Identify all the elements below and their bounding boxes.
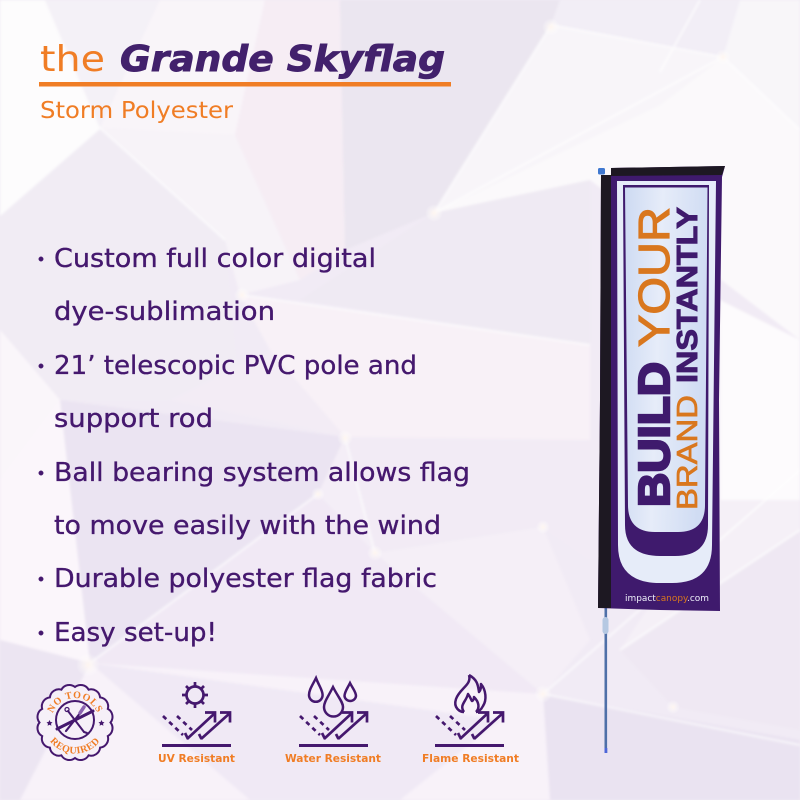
badge: no tools required: NO TOOLS (46, 692, 102, 714)
icon: water resistant (299, 678, 368, 747)
feature list (39, 244, 470, 648)
feature list: to move easily with the wind (54, 511, 441, 541)
title underline (39, 82, 451, 86)
label: UV resistant: UV Resistant (158, 752, 235, 765)
icon: pole top cap (598, 168, 605, 174)
icon: UV resistant (162, 682, 231, 747)
flag slogan: INSTANTLY (672, 207, 704, 383)
flag pole (602, 605, 608, 753)
flag slogan: YOUR (630, 207, 679, 347)
title: Grande Skyflag (120, 39, 445, 80)
feature list: Easy set-up! (54, 618, 217, 648)
badge: no tools required (36, 684, 114, 761)
feature list: support rod (54, 404, 213, 434)
feature list: dye-sublimation (54, 297, 275, 327)
feature list: 21’ telescopic PVC pole and (54, 351, 417, 381)
flag slogan: BRAND (672, 395, 704, 510)
label: water resistant: Water Resistant (285, 752, 381, 765)
flag web address: impactcanopy.com (625, 594, 709, 604)
label: flame resistant: Flame Resistant (422, 752, 519, 765)
flag slogan: BUILD (630, 362, 679, 507)
flag (598, 166, 725, 611)
title: the (40, 39, 105, 80)
feature list: Durable polyester flag fabric (54, 564, 437, 594)
flag slogan (630, 207, 704, 510)
feature list: Custom full color digital (54, 244, 376, 274)
icon: flame resistant (435, 675, 504, 747)
subtitle: Storm Polyester (40, 98, 234, 124)
badge: no tools required: REQUIRED (50, 736, 98, 754)
feature list: Ball bearing system allows flag (54, 458, 470, 488)
